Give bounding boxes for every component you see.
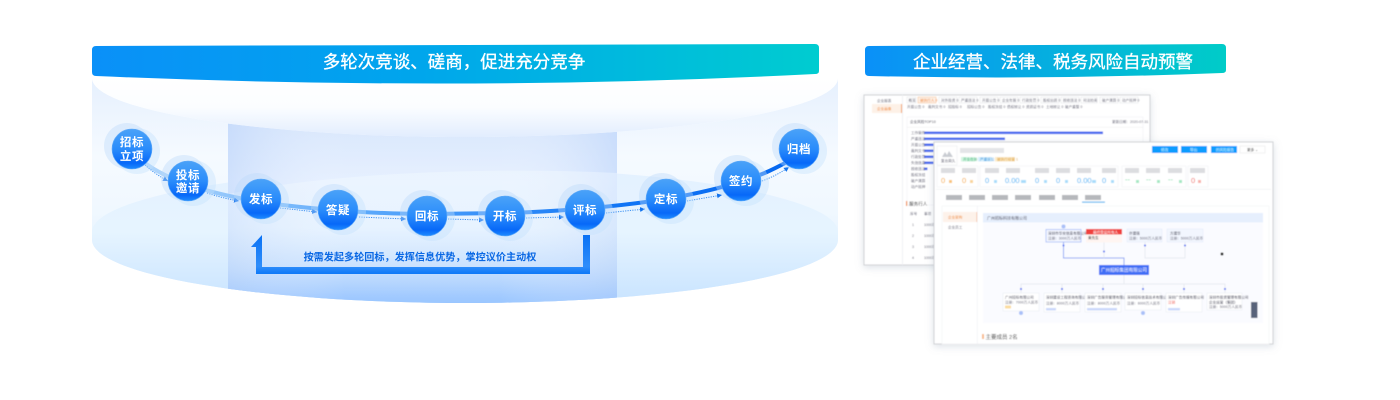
screenshot: front panel, enterprise profile xyxy=(934,142,1273,344)
stat cards: 0 xyxy=(1056,176,1060,185)
subsidiaries: 深圳广告传媒有限公司 xyxy=(1168,294,1204,300)
risk bar chart: 破产清算 xyxy=(911,178,926,183)
risk bar chart: 动产抵押 xyxy=(911,184,926,189)
screenshot: back panel, enterprise portrait: 企业画像 xyxy=(877,106,892,111)
tab chips: 开庭公告 0 xyxy=(982,97,999,102)
tab chips: 司法拍卖 xyxy=(1083,97,1098,102)
action buttons: 更多 ⌄ xyxy=(1247,147,1258,152)
return arrow xyxy=(251,235,590,274)
stat cards: 0 xyxy=(941,176,945,185)
screenshot: back panel, enterprise portrait: 1000项 xyxy=(924,223,936,227)
screenshot: back panel, enterprise portrait xyxy=(864,95,1150,265)
screenshot: back panel, enterprise portrait: 4 xyxy=(912,256,914,260)
screenshot: back panel, enterprise portrait: 企业报表 xyxy=(877,98,892,103)
node: 回标 xyxy=(400,190,455,241)
node: 开标 xyxy=(478,190,533,241)
tab chips: 概览 xyxy=(908,97,916,102)
stat cards: 0 xyxy=(962,176,966,185)
subsidiaries: 深圳招标信息技术有限公司 xyxy=(1127,294,1171,300)
tab chips: 企业年报 0 xyxy=(1002,97,1019,102)
action buttons: 导出 xyxy=(1190,147,1198,152)
section tabs xyxy=(946,195,1105,203)
node: 招标立项: 立项 xyxy=(120,149,144,163)
risk bar chart: 工作案件 xyxy=(911,130,926,135)
status tags: 严重诉讼 xyxy=(980,156,995,161)
center company xyxy=(1099,265,1149,275)
subsidiaries: 注册：8000万人民币 xyxy=(1087,300,1121,306)
subsidiaries: 注册：7000万人民币 xyxy=(1005,300,1039,304)
node: 开标: 开标 xyxy=(493,209,517,223)
tab chips: 裁判文书 0 xyxy=(928,104,945,109)
left banner xyxy=(92,44,819,84)
subsidiaries: 企业运营（集团） xyxy=(1209,300,1238,304)
stat cards: 0 xyxy=(1035,176,1039,185)
risk bar chart: 行政处罚 xyxy=(911,154,926,159)
action buttons xyxy=(1152,146,1265,153)
company logo placeholder: 复台周久 xyxy=(941,158,956,163)
node: 招标立项 xyxy=(104,123,160,174)
node: 定标: 定标 xyxy=(654,192,678,206)
tab chips: 股权出质 0 xyxy=(1043,97,1060,102)
screenshot: back panel, enterprise portrait: 企业风险TOP10 xyxy=(910,119,936,124)
subsidiaries: 广州招标有限公司 xyxy=(1005,294,1034,300)
tab chips: 严重违法 0 xyxy=(961,97,978,102)
node: 归档: 归档 xyxy=(787,142,811,156)
staff heading: 服务行人 xyxy=(909,200,928,208)
screenshot: back panel, enterprise portrait: 更新日期：2020-07-31 xyxy=(1112,119,1148,124)
shareholders: 注册：3000万人民币 xyxy=(1048,236,1082,240)
node: 投标邀请: 投标 xyxy=(176,168,200,182)
tab chips xyxy=(907,97,1139,109)
stat cards: -- xyxy=(1146,175,1151,184)
tab chips: 税收违法 0 xyxy=(1063,97,1080,102)
subsidiaries: 注册：5000万人民币 xyxy=(1209,304,1243,309)
node: 归档 xyxy=(772,123,827,174)
dotted step arrows xyxy=(145,165,789,220)
staff heading xyxy=(905,200,928,206)
tab chips: 债权转让 0 xyxy=(1007,104,1024,109)
status tags: 被执行经营 1 xyxy=(997,156,1018,161)
shareholders: 许建强 xyxy=(1129,230,1140,236)
tab chips: 招投标 0 xyxy=(948,104,962,109)
screenshot: back panel, enterprise portrait: 事项 xyxy=(924,211,932,216)
org chart: 广州招标科技有限公司 xyxy=(987,214,1027,220)
tab chips: 破产清算 0 xyxy=(1102,97,1119,102)
process curve xyxy=(145,162,787,214)
sub navigation xyxy=(943,206,978,344)
members heading xyxy=(982,333,1018,341)
tab chips: 动产抵押 0 xyxy=(1122,97,1139,102)
risk bar chart: 裁判文书 xyxy=(911,148,926,153)
screenshot: back panel, enterprise portrait: 1000项 xyxy=(924,234,936,238)
cylinder stage xyxy=(92,80,838,303)
stat cards: 0.00 xyxy=(1077,176,1092,185)
members heading: 主要成员 2名 xyxy=(986,333,1018,341)
shareholders: 深圳市华安信息有限公司 xyxy=(1048,230,1088,236)
node: 回标: 回标 xyxy=(415,209,439,223)
stat cards: 0 xyxy=(1191,176,1195,185)
node: 签约: 签约 xyxy=(729,174,753,188)
sub navigation: 企业架构 xyxy=(948,214,963,220)
sub navigation: 企业员工 xyxy=(948,224,963,230)
subsidiaries: 深圳广告服务管理有限公司 xyxy=(1087,294,1131,300)
stat cards: -- xyxy=(1125,175,1130,184)
shareholders: 黄先生 xyxy=(1088,235,1099,240)
shareholders: 最终受益所有人 xyxy=(1093,229,1119,234)
status tags: 开业在册 xyxy=(963,156,978,161)
node: 签约 xyxy=(714,155,769,206)
stat cards: -- xyxy=(1168,175,1173,184)
stat cards xyxy=(937,166,1208,187)
risk bar chart: 失信信息 xyxy=(911,160,926,165)
tab chips: 破产重整 0 xyxy=(1065,104,1082,109)
subsidiaries: 注销 xyxy=(1168,300,1176,304)
node: 发标: 发标 xyxy=(249,192,273,206)
node: 答疑: 答疑 xyxy=(326,203,350,217)
node: 发标 xyxy=(234,173,289,224)
action buttons: 的风险报告 xyxy=(1216,147,1234,152)
status tags xyxy=(961,156,1018,162)
screenshot: back panel, enterprise portrait: 2 xyxy=(912,234,914,238)
subsidiaries: 深圳建设工程咨询有限公司 xyxy=(1046,294,1090,300)
tab chips: 对外投资 0 xyxy=(941,97,958,102)
shareholders xyxy=(1046,229,1204,242)
stat cards: 0.00 xyxy=(1005,176,1020,185)
screenshot: back panel, enterprise portrait: 1000项 xyxy=(924,256,936,260)
tab chips: 资质证书 0 xyxy=(1026,104,1043,109)
node: 投标邀请: 邀请 xyxy=(176,181,200,195)
tab chips: 招标公告 0 xyxy=(967,104,984,109)
screenshot: back panel, enterprise portrait: 1 xyxy=(912,223,914,227)
tab chips: 股权冻结 0 xyxy=(988,104,1005,109)
right banner xyxy=(865,44,1226,77)
risk bar chart: 税收违法 xyxy=(911,166,926,171)
screenshot: back panel, enterprise portrait: 序号 xyxy=(910,211,918,216)
node: 评标: 评标 xyxy=(573,203,597,217)
risk bar chart: 股权冻结 xyxy=(911,172,926,177)
node: 招标立项: 招标 xyxy=(120,135,144,149)
dark side tool xyxy=(1251,302,1258,318)
shareholders: 注册：5000万人民币 xyxy=(1170,236,1204,240)
subsidiaries: 深圳市投资管理有限公司 xyxy=(1209,294,1249,300)
stat cards: 0 xyxy=(1102,176,1106,185)
risk bar chart: 严重违法 xyxy=(911,136,926,141)
stat cards: 0 xyxy=(985,176,989,185)
screenshot: back panel, enterprise portrait: 3 xyxy=(912,245,914,249)
left banner title: 多轮次竞谈、磋商，促进充分竞争 xyxy=(323,52,585,72)
tab chips: 被执行人 0 xyxy=(920,97,937,102)
node: 定标 xyxy=(639,173,694,224)
subsidiaries xyxy=(1003,293,1249,312)
tab chips: 行政处罚 0 xyxy=(1022,97,1039,102)
right banner title: 企业经营、法律、税务风险自动预警 xyxy=(913,52,1193,72)
return arrow caption: 按需发起多轮回标，发挥信息优势，掌控议价主动权 xyxy=(304,250,536,264)
highlighted stage band xyxy=(228,120,617,305)
shareholders: 方建华 xyxy=(1170,230,1181,236)
company logo placeholder xyxy=(937,146,957,165)
center company: 广州招标集团有限公司 xyxy=(1101,267,1147,274)
node: 评标 xyxy=(558,184,613,235)
org chart xyxy=(983,213,1263,323)
action buttons: 修改 xyxy=(1161,147,1169,152)
percent markers xyxy=(1019,224,1226,315)
node: 答疑 xyxy=(311,184,366,235)
screenshot: back panel, enterprise portrait: 1000项 xyxy=(924,245,936,249)
shareholders: 注册：5000万人民币 xyxy=(1129,236,1163,240)
risk bar chart: 开庭公告 xyxy=(911,142,926,147)
risk bar chart xyxy=(911,130,1103,189)
tab chips: 开庭公告 0 xyxy=(907,104,924,109)
tab chips: 土地转让 0 xyxy=(1046,104,1063,109)
node: 投标邀请 xyxy=(161,155,216,206)
subsidiaries: 注册：6000万人民币 xyxy=(1127,300,1161,306)
subsidiaries: 注册：8000万人民币 xyxy=(1046,300,1080,306)
